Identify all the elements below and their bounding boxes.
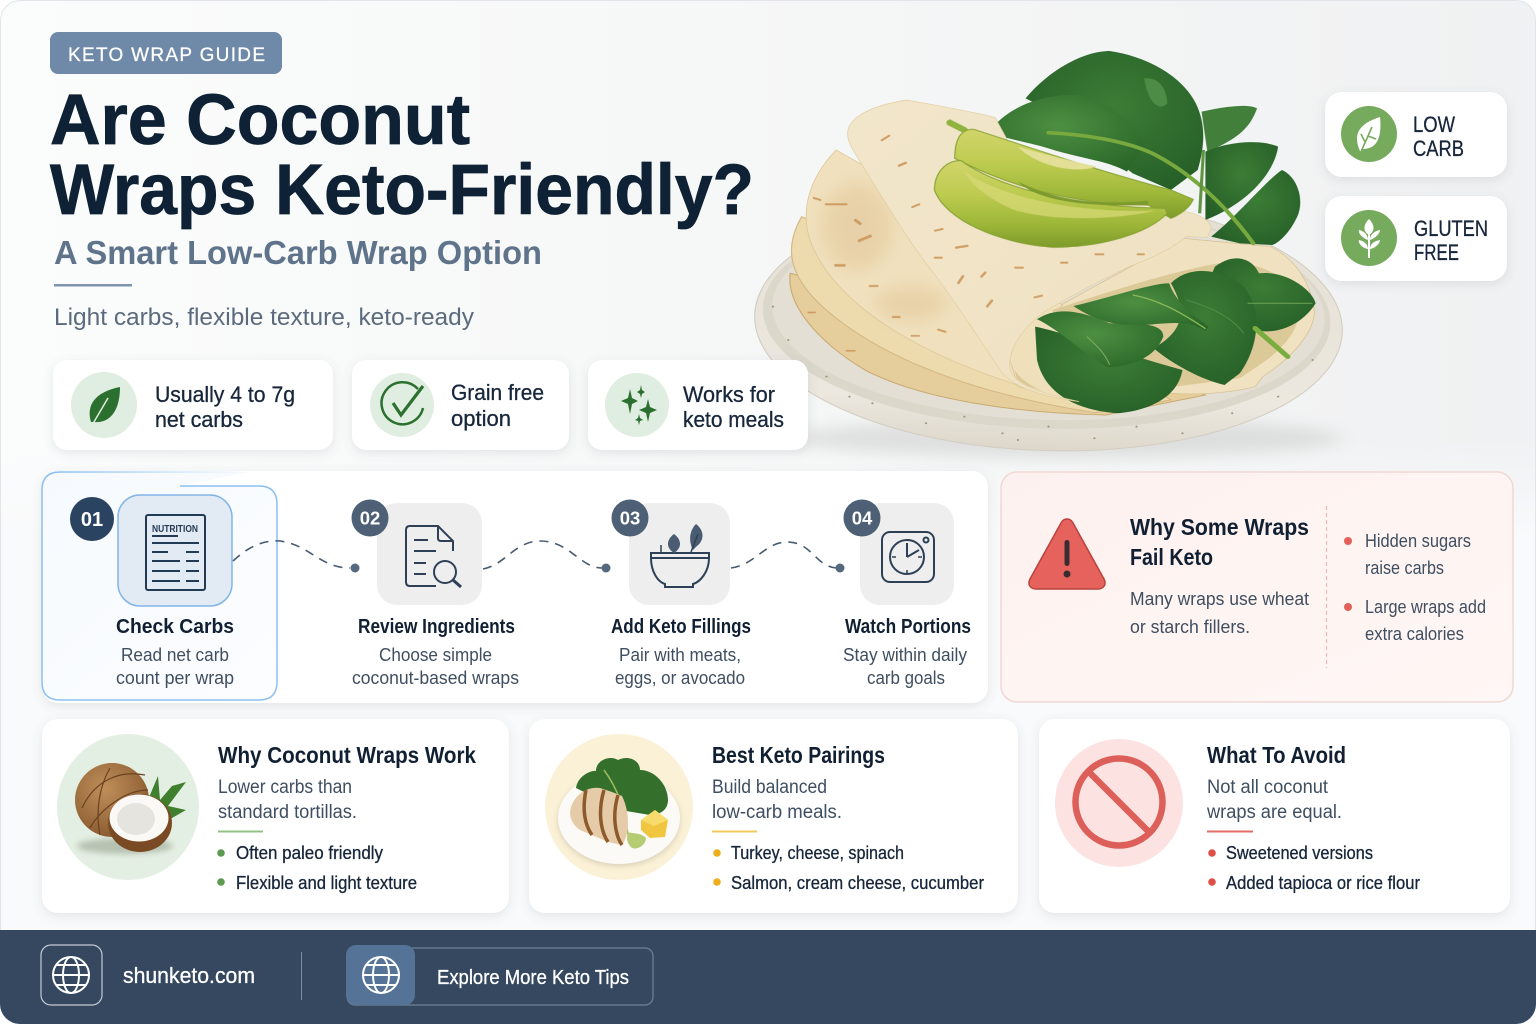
list: hidden risks: Large wraps add [1365, 597, 1486, 617]
icon: nutrition label [146, 515, 205, 590]
badge: gluten free: GLUTEN [1414, 216, 1488, 241]
spinach stem [1049, 133, 1253, 243]
list: coconut benefits: Flexible and light texture [236, 873, 417, 893]
card: why coconut wraps work [42, 719, 509, 913]
avocado slices [934, 123, 1193, 247]
panel: four steps [42, 471, 988, 703]
badge: gluten free: FREE [1414, 240, 1459, 265]
step 2: review ingredients [352, 500, 519, 688]
list: hidden risks: extra calories [1365, 624, 1464, 644]
list: things to avoid: Sweetened versions [1226, 843, 1373, 863]
card: best keto pairings: Best Keto Pairings [712, 742, 885, 768]
step 4: watch portions: Stay within daily [843, 645, 967, 665]
icon: plate of chicken and spinach [545, 734, 693, 880]
icon: wheat [1341, 210, 1397, 266]
list: coconut benefits [217, 843, 417, 893]
step 1: check carbs: 01 [81, 509, 103, 531]
step 4: watch portions: 04 [852, 508, 873, 528]
button: explore more keto tips [346, 945, 653, 1005]
step 4: watch portions: Watch Portions [845, 616, 971, 638]
list: pairings: Turkey, cheese, spinach [731, 843, 904, 863]
step 3: add keto fillings [611, 500, 751, 688]
icon: leaf [1341, 106, 1397, 162]
icon: document search [406, 526, 461, 587]
icon: nutrition label: NUTRITION [152, 524, 198, 535]
chip: keto meals: keto meals [683, 407, 784, 432]
list: hidden risks: raise carbs [1365, 558, 1444, 578]
badge: low carb: CARB [1413, 136, 1464, 161]
icon: timer [882, 532, 934, 582]
chip: grain free: option [451, 406, 511, 431]
step 3: add keto fillings: eggs, or avocado [615, 668, 745, 688]
icon: leaf [71, 372, 137, 438]
chip: grain free: Grain free [451, 380, 544, 405]
list: pairings: Salmon, cream cheese, cucumber [731, 873, 984, 893]
chip: net carbs: Usually 4 to 7g [155, 382, 295, 407]
card: best keto pairings: low-carb meals. [712, 802, 842, 823]
badge: low carb: LOW [1413, 112, 1455, 137]
card: what to avoid: wraps are equal. [1206, 802, 1342, 823]
panel: why some wraps fail keto: Why Some Wraps [1130, 514, 1309, 540]
list: things to avoid [1208, 843, 1420, 893]
icon: salad bowl [651, 524, 709, 587]
arrow: step 1 to 2 [233, 541, 360, 572]
card: why coconut wraps work: Why Coconut Wraps Work [218, 742, 477, 768]
lower tortilla layers [790, 150, 1205, 415]
card: best keto pairings [529, 719, 1018, 913]
chip: keto meals: Works for [683, 382, 775, 407]
step 3: add keto fillings: 03 [620, 508, 640, 528]
list: coconut benefits: Often paleo friendly [236, 843, 383, 863]
card: what to avoid [1039, 719, 1510, 913]
back tortilla layer with open wrap [1010, 238, 1314, 403]
icon: globe [41, 945, 102, 1005]
back spinach leaves [989, 51, 1300, 245]
list: things to avoid: Added tapioca or rice flour [1226, 873, 1420, 893]
icon: prohibited sign [1055, 739, 1183, 867]
step 4: watch portions: carb goals [867, 668, 945, 688]
badge: gluten free [1325, 196, 1507, 281]
panel: why some wraps fail keto: Many wraps use wheat [1130, 588, 1309, 609]
step 1: check carbs: Read net carb [121, 645, 229, 665]
icon: warning triangle [1029, 519, 1105, 589]
step 4: watch portions [843, 500, 971, 688]
panel: why some wraps fail keto: Fail Keto [1130, 544, 1213, 570]
card: best keto pairings: Build balanced [712, 777, 827, 798]
step 3: add keto fillings: Add Keto Fillings [611, 616, 751, 638]
title: Are Coconut [50, 81, 470, 160]
icon: sparkles [605, 373, 669, 437]
step 3: add keto fillings: Pair with meats, [619, 645, 741, 665]
icon: coconut [57, 734, 199, 880]
step 2: review ingredients: Choose simple [379, 645, 492, 665]
title [50, 81, 754, 230]
badge: keto wrap guide [50, 32, 282, 74]
step 1: check carbs: count per wrap [116, 668, 234, 688]
chip: net carbs [53, 360, 333, 450]
subtitle: A Smart Low-Carb Wrap Option [54, 234, 542, 271]
badge: keto wrap guide: KETO WRAP GUIDE [68, 45, 265, 66]
lower spinach leaves [1035, 258, 1316, 413]
arrow: step 2 to 3 [483, 541, 610, 572]
card: why coconut wraps work: Lower carbs than [218, 777, 352, 798]
list: hidden risks [1344, 531, 1486, 644]
step 1: check carbs [42, 472, 277, 700]
step 1: check carbs: Check Carbs [116, 616, 234, 638]
hero photo: coconut wrap on plate [750, 51, 1347, 459]
card: what to avoid: Not all coconut [1207, 777, 1329, 798]
icon: check circle [370, 373, 434, 437]
step 2: review ingredients: coconut-based wraps [352, 668, 519, 688]
card: why coconut wraps work: standard tortillas. [218, 802, 357, 823]
button: explore more keto tips: Explore More Keto Tips [437, 967, 629, 989]
list: hidden risks: Hidden sugars [1365, 531, 1471, 551]
badge: low carb [1325, 92, 1507, 177]
chip: keto meals [588, 360, 808, 450]
step 2: review ingredients: 02 [360, 508, 380, 528]
plate [754, 218, 1343, 452]
arrow: step 3 to 4 [731, 542, 844, 572]
panel: why some wraps fail keto [1001, 472, 1513, 702]
chip: net carbs: net carbs [155, 407, 243, 432]
website: shunketo.com [123, 963, 255, 988]
step 2: review ingredients: Review Ingredients [358, 616, 515, 638]
panel: why some wraps fail keto: or starch fillers. [1130, 616, 1250, 637]
chip: grain free [352, 360, 569, 450]
title: Wraps Keto-Friendly? [50, 151, 754, 230]
card: what to avoid: What To Avoid [1207, 742, 1346, 768]
list: pairings [713, 843, 984, 893]
main tortilla fold [848, 100, 1211, 402]
footer bar [0, 930, 1536, 1024]
tagline: Light carbs, flexible texture, keto-ready [54, 304, 474, 331]
